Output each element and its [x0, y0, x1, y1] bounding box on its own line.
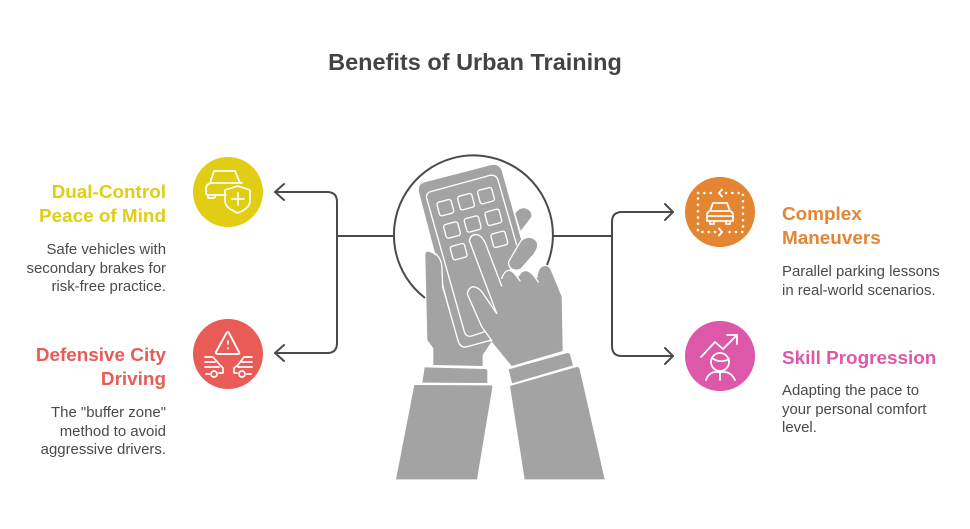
description: Complex Maneuvers: Parallel parking lessons	[782, 263, 940, 280]
upper fingertip behind phone	[515, 208, 531, 232]
index finger	[469, 235, 503, 313]
description: Skill Progression	[782, 382, 926, 436]
icon: warning triangle and cars	[193, 319, 263, 389]
left cuff	[422, 367, 487, 383]
description: Dual-Control: risk-free practice.	[51, 278, 166, 295]
central circle outline	[394, 155, 553, 298]
connector: right branches	[553, 204, 673, 364]
heading: Defensive City Driving: Driving	[101, 369, 166, 390]
description: Skill Progression: level.	[782, 419, 817, 436]
description: Dual-Control	[26, 241, 166, 295]
description: Complex Maneuvers: in real-world scenarios.	[782, 282, 936, 298]
description: Skill Progression: Adapting the pace to	[782, 382, 919, 399]
right sleeve	[510, 367, 605, 479]
icon: car with shield	[193, 157, 263, 227]
left sleeve	[396, 385, 492, 479]
heading: Dual-Control Peace of Mind: Dual-Control	[52, 182, 166, 203]
heading: Complex Maneuvers	[782, 204, 881, 249]
finger outlines	[467, 213, 538, 341]
heading: Dual-Control Peace of Mind: Peace of Mind	[39, 206, 166, 227]
description: Skill Progression: your personal comfort	[782, 400, 926, 418]
phone body	[419, 165, 522, 348]
left hand	[425, 252, 492, 366]
description: Dual-Control: secondary brakes for	[26, 260, 166, 276]
description: Defensive City Driving	[41, 404, 166, 458]
heading: Defensive City Driving	[36, 345, 166, 390]
description: Defensive City Driving: The "buffer zone"	[51, 404, 166, 421]
right hand	[467, 266, 563, 366]
right cuff	[509, 353, 573, 383]
description: Dual-Control: Safe vehicles with	[46, 241, 166, 258]
heading: Dual-Control Peace of Mind	[39, 182, 166, 227]
icon: person with rising arrow	[685, 321, 755, 391]
heading: Skill Progression: Skill Progression	[782, 348, 936, 369]
heading: Complex Maneuvers: Maneuvers	[782, 228, 881, 249]
heading: Defensive City Driving: Defensive City	[36, 345, 166, 366]
description: Complex Maneuvers	[782, 263, 940, 298]
icon: car with dotted parking box	[685, 177, 755, 247]
heading: Complex Maneuvers: Complex	[782, 204, 862, 225]
connector: left branches	[275, 184, 394, 361]
description: Defensive City Driving: aggressive drivers.	[41, 441, 166, 458]
description: Defensive City Driving: method to avoid	[60, 422, 166, 440]
title: Benefits of Urban Training	[328, 48, 622, 74]
central illustration: hands holding phone	[396, 165, 605, 479]
phone and finger white details	[426, 175, 517, 347]
